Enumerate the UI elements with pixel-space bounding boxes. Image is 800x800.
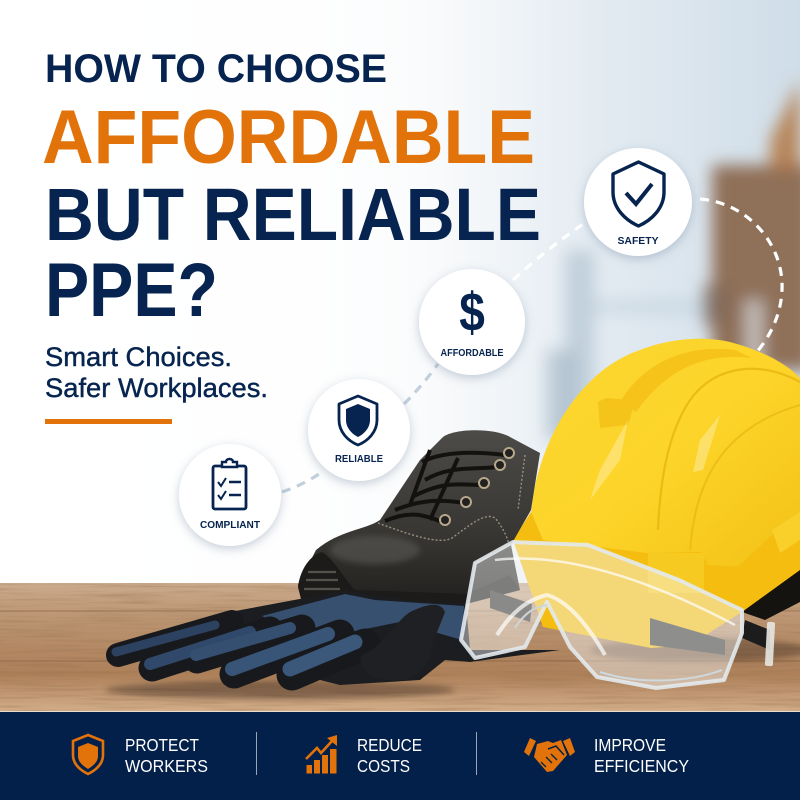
benefit: protect workers: WORKERS xyxy=(125,756,208,776)
badge: compliant: COMPLIANT xyxy=(200,519,261,531)
safety boot xyxy=(298,430,540,607)
helmet brim xyxy=(513,512,800,648)
title: AFFORDABLE xyxy=(42,95,535,180)
badge: safety: SAFETY xyxy=(618,235,658,247)
bottom navy band xyxy=(0,711,800,800)
title: BUT RELIABLE xyxy=(45,173,541,256)
subtitle: Smart Choices. xyxy=(45,342,232,372)
boot laces and eyelets xyxy=(385,448,514,525)
divider xyxy=(476,732,477,775)
title: PPE? xyxy=(45,248,218,333)
orange accent rule xyxy=(45,419,172,424)
subtitle xyxy=(45,342,268,403)
benefit: improve efficiency: EFFICIENCY xyxy=(594,756,689,776)
benefit: reduce costs: COSTS xyxy=(357,756,410,776)
title xyxy=(42,47,541,333)
hard hat xyxy=(513,339,800,662)
divider xyxy=(256,732,257,775)
benefit: improve efficiency: IMPROVE xyxy=(594,735,666,755)
benefit: reduce costs xyxy=(306,735,422,776)
icon: solid shield xyxy=(339,396,377,445)
icon: handshake xyxy=(524,738,575,772)
work gloves xyxy=(105,590,560,699)
badge: affordable: AFFORDABLE xyxy=(440,347,504,359)
icon: rising bar chart xyxy=(306,735,337,774)
safety goggles xyxy=(461,542,775,688)
badge: reliable: RELIABLE xyxy=(335,453,383,465)
benefit: reduce costs: REDUCE xyxy=(357,735,422,755)
dashed connector path xyxy=(282,199,782,492)
benefit: protect workers: PROTECT xyxy=(125,735,199,755)
wooden table surface xyxy=(0,583,800,713)
benefit: improve efficiency xyxy=(524,735,689,776)
title: HOW TO CHOOSE xyxy=(45,47,387,91)
badge: affordable xyxy=(419,269,525,375)
badge: reliable xyxy=(308,379,410,481)
blurred construction-site background xyxy=(0,0,800,590)
badge: compliant xyxy=(179,444,281,546)
icon: clipboard checklist xyxy=(213,459,246,509)
subtitle: Safer Workplaces. xyxy=(45,373,268,403)
icon: dollar sign: $ xyxy=(459,281,485,343)
icon: shield with check xyxy=(613,162,664,226)
badge: safety xyxy=(584,148,692,256)
icon: orange shield xyxy=(73,735,103,774)
benefit: protect workers xyxy=(73,735,208,776)
